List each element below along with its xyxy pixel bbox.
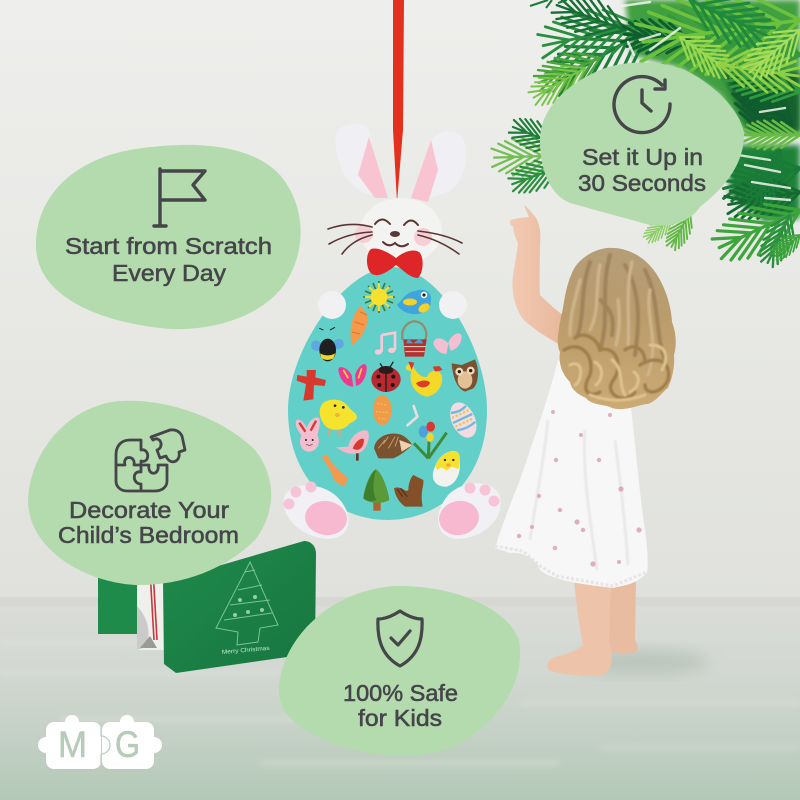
wall background (0, 0, 800, 600)
dress (495, 360, 648, 588)
bee sticker (311, 327, 344, 361)
single note sticker (407, 405, 417, 426)
floor background (0, 597, 800, 800)
owl sticker (452, 359, 478, 392)
egg body (288, 267, 487, 520)
bird sticker (397, 290, 431, 314)
cross sticker (297, 370, 326, 401)
ribbon (393, 0, 404, 202)
callout text: Decorate Your (69, 497, 229, 523)
callout text: Start from Scratch (65, 233, 272, 259)
chick egg sticker (433, 451, 460, 487)
icon: clock with arrow (614, 77, 670, 133)
right foot (436, 482, 501, 539)
orange bunny carrot sticker (322, 454, 348, 487)
callout text (578, 144, 706, 196)
callout text: Set it Up in (582, 144, 703, 170)
hands (318, 291, 467, 319)
chick sticker (320, 400, 357, 437)
orange egg sticker (373, 395, 392, 425)
ornaments and pages (137, 570, 164, 650)
callout text: 100% Safe (343, 680, 458, 706)
raised arm (510, 205, 563, 345)
left foot (284, 482, 349, 539)
left ear (335, 124, 388, 198)
blonde curly hair (558, 248, 676, 409)
pine branches (491, 0, 800, 270)
whiskers (328, 224, 462, 254)
magenta butterfly sticker (338, 364, 367, 387)
felt bunny (284, 124, 501, 539)
callout shape (279, 586, 520, 756)
face (355, 220, 432, 246)
felt sticker set (296, 321, 482, 511)
carrot sticker (351, 306, 368, 345)
tree sticker (363, 469, 389, 511)
music notes sticker (382, 333, 395, 352)
head (360, 198, 442, 264)
callout shape (36, 145, 301, 329)
bow tie (367, 249, 423, 278)
hedgehog sticker (374, 434, 413, 458)
callout shape (540, 62, 744, 226)
squirrel sticker (394, 475, 423, 507)
callout text: for Kids (358, 705, 442, 731)
logo: M G puzzle: G (115, 724, 140, 765)
pink bird sticker (336, 430, 369, 461)
icon: puzzle pieces (116, 430, 185, 491)
product box (98, 541, 316, 673)
hen sticker (406, 362, 443, 397)
callout: 100% safe for kids (279, 586, 520, 756)
callout: set it up in 30 seconds (540, 62, 744, 226)
callout text (58, 497, 239, 548)
dress flower pattern (517, 410, 642, 567)
callout: start from scratch (36, 145, 301, 329)
merry christmas caption: Merry Christmas (222, 646, 270, 656)
box front cover (163, 541, 316, 673)
icon: flag (154, 169, 205, 226)
icon: shield with check (378, 611, 422, 666)
logo: M G puzzle: M (58, 724, 87, 765)
callout: decorate your child's bedroom (28, 401, 271, 585)
tulip sticker (414, 422, 447, 458)
callout text (65, 233, 272, 286)
tree outline decoration (216, 562, 278, 645)
box back cover (98, 570, 137, 634)
floor shadow (570, 650, 710, 674)
right ear (411, 131, 466, 202)
basket sticker (402, 321, 427, 357)
rabbit sticker (296, 417, 320, 452)
pink butterfly sticker (433, 333, 462, 354)
child (495, 205, 710, 676)
easter egg sticker (445, 398, 482, 442)
sun sticker (363, 281, 395, 313)
legs and feet (547, 580, 638, 676)
logo: M G puzzle (38, 715, 162, 769)
callout text: Every Day (112, 260, 227, 286)
note heads (375, 348, 395, 355)
ladybug sticker (371, 362, 401, 392)
callout text: 30 Seconds (578, 170, 706, 196)
callout shape (28, 401, 271, 585)
callout text (343, 680, 458, 731)
callout text: Child’s Bedroom (58, 522, 239, 548)
